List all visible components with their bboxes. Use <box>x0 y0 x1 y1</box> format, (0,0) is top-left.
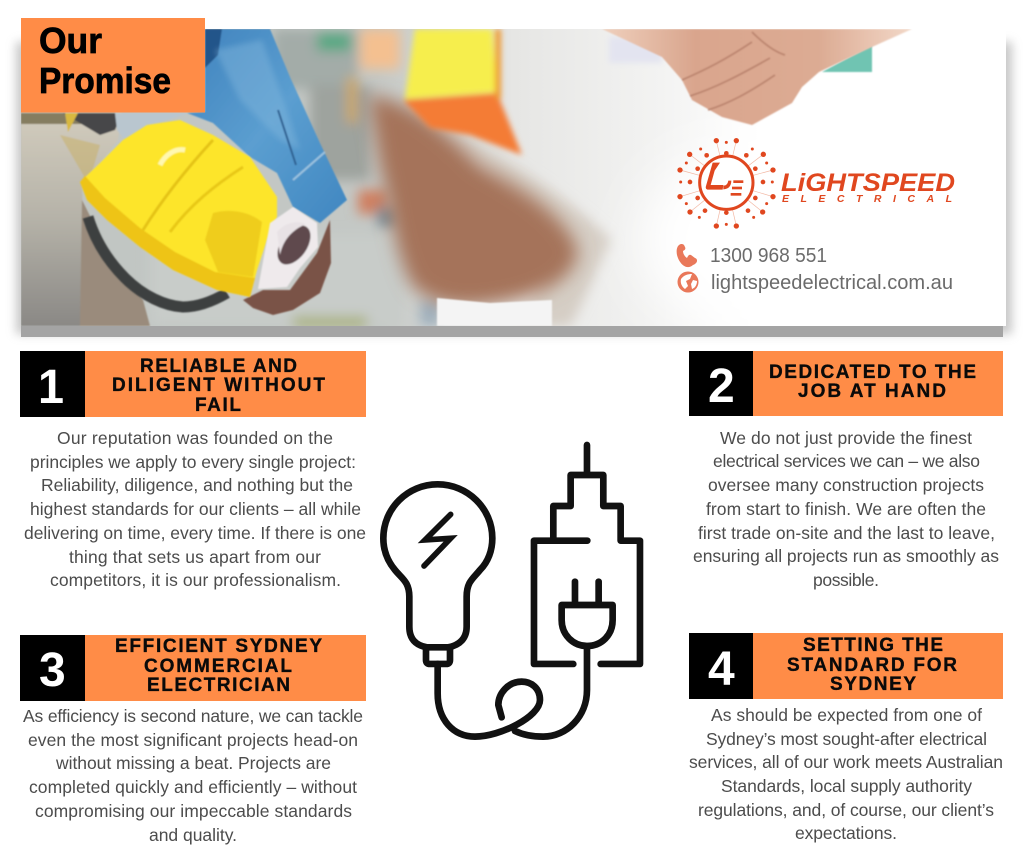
section 2 body: ensuring all projects run as smoothly as <box>693 546 999 566</box>
section 1 header: FAIL <box>195 395 241 416</box>
section 4 <box>689 633 1003 843</box>
logo subline: ELECTRICAL <box>782 193 952 205</box>
section 2 body: electrical services we can – we also <box>713 451 980 471</box>
section 2 body <box>693 428 999 590</box>
icon: phone <box>677 244 697 267</box>
section 1 header: RELIABLE AND <box>140 356 297 377</box>
phone number: 1300 968 551 <box>710 245 827 267</box>
section 2 <box>689 351 1003 590</box>
section 1 body: principles we apply to every single project: <box>30 452 356 472</box>
section 1 body: highest standards for our clients – all while <box>30 499 361 519</box>
website: lightspeedelectrical.com.au <box>711 272 953 294</box>
logo emblem <box>677 138 776 229</box>
section 3 body: even the most significant projects head-on <box>28 730 358 750</box>
section 1 body: Our reputation was founded on the <box>57 428 333 448</box>
title box: Our <box>39 20 102 61</box>
plug <box>562 582 613 646</box>
icon: globe <box>678 272 698 292</box>
section 3 header: 3 <box>39 644 66 697</box>
title box: Promise <box>39 60 171 101</box>
section 4 body: expectations. <box>795 823 897 843</box>
section 1 header <box>20 351 366 417</box>
section 3 body: completed quickly and efficiently – without <box>29 777 357 797</box>
section 3 body: As efficiency is second nature, we can tackle <box>23 706 363 726</box>
section 4 body: Sydney’s most sought-after electrical <box>706 729 987 749</box>
blurred worker hand <box>368 95 578 306</box>
section 4 header <box>689 633 1003 699</box>
lightspeed logo <box>677 138 955 229</box>
section 3 body <box>23 706 363 845</box>
pale background panels <box>609 37 662 63</box>
section 2 body: from start to finish. We are often the <box>706 499 986 519</box>
denim jacket <box>187 29 347 223</box>
bulb <box>383 484 492 664</box>
lightning bolt <box>424 514 451 566</box>
section 2 body: oversee many construction projects <box>708 475 984 495</box>
banner shadow <box>16 42 1012 337</box>
cloth <box>464 142 614 326</box>
section 4 header: SETTING THE <box>803 635 943 656</box>
building <box>534 445 640 664</box>
section 4 body <box>689 705 1003 843</box>
document <box>437 298 552 326</box>
white glow behind logo <box>652 199 698 280</box>
section 2 header: 2 <box>708 360 735 413</box>
section 3 body: compromising our impeccable standards <box>35 801 352 821</box>
title box <box>21 18 205 112</box>
section 3 header <box>20 635 366 701</box>
section 3 body: without missing a beat. Projects are <box>55 753 331 773</box>
logo wordmark: LiGHTSPEED <box>781 169 955 197</box>
banner <box>16 18 1020 350</box>
section 1 header: 1 <box>38 361 64 414</box>
section 4 header: 4 <box>708 643 735 696</box>
section 4 header: SYDNEY <box>830 674 916 695</box>
section 4 body: As should be expected from one of <box>711 705 982 725</box>
section 4 body: services, all of our work meets Australian <box>689 752 1003 772</box>
section 1 header: DILIGENT WITHOUT <box>112 375 325 396</box>
hi-vis vest <box>403 29 522 155</box>
section 1 body <box>24 428 366 590</box>
section 4 body: regulations, and, of course, our client’s <box>698 800 994 820</box>
section 4 body: Standards, local supply authority <box>721 776 972 796</box>
teal object <box>822 45 872 72</box>
section 1 body: Reliability, diligence, and nothing but the <box>41 475 353 495</box>
section 1 <box>20 351 366 590</box>
section 1 body: competitors, it is our professionalism. <box>50 570 341 590</box>
section 4 header: STANDARD FOR <box>787 655 957 676</box>
trousers <box>21 112 190 326</box>
section 2 body: We do not just provide the finest <box>720 428 972 448</box>
icon: light bulb plugged into building <box>383 445 640 737</box>
section 2 header: DEDICATED TO THE <box>769 362 976 383</box>
section 2 body: possible. <box>813 570 879 590</box>
section 3 header: ELECTRICIAN <box>147 675 290 696</box>
rolled plans <box>258 207 318 289</box>
section 3 header: COMMERCIAL <box>144 656 292 677</box>
section 1 body: thing that sets us apart from our <box>69 547 321 567</box>
section 3 body: and quality. <box>149 825 237 845</box>
section 3 <box>20 635 366 845</box>
handshake <box>602 29 912 125</box>
banner photo <box>21 29 1020 350</box>
section 2 header <box>689 351 1003 416</box>
background scaffolding <box>272 29 438 326</box>
section 2 body: first trade on-site and the last to leave, <box>698 523 995 543</box>
yellow hard hat <box>80 120 277 297</box>
section 1 body: delivering on time, every time. If there is one <box>24 523 366 543</box>
holding hand <box>243 220 331 315</box>
section 3 header: EFFICIENT SYDNEY <box>115 636 322 657</box>
contact details <box>677 244 953 294</box>
hard hat strap <box>88 217 227 307</box>
cords <box>438 647 587 737</box>
section 2 header: JOB AT HAND <box>798 381 946 402</box>
